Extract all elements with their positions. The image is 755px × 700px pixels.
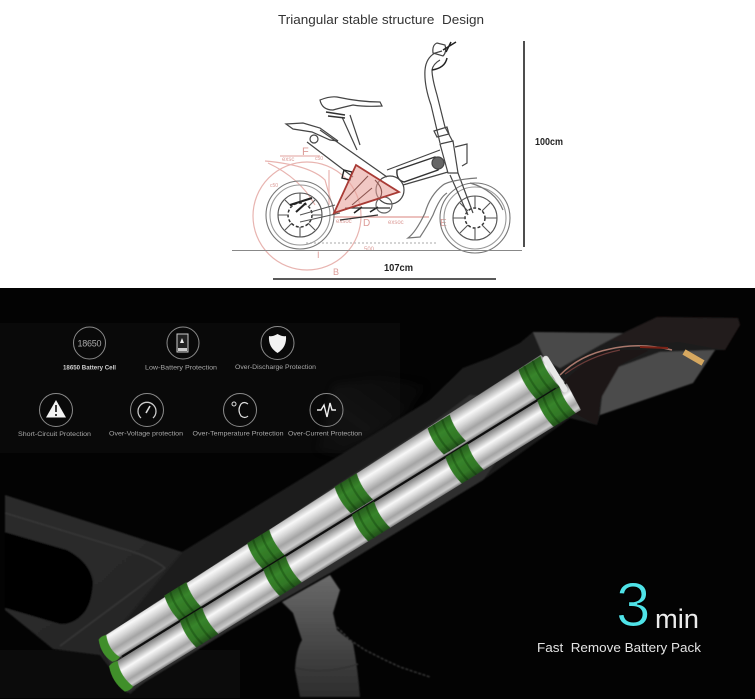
label: 18650 battery cell: 18650 Battery Cell (63, 366, 116, 372)
pink dimension overlay: 500 (364, 247, 375, 253)
label: low-battery protection: Low-Battery Protection (145, 366, 217, 372)
icon: temperature (224, 394, 256, 426)
callout: 3 min (537, 571, 702, 655)
top white panel (0, 0, 755, 288)
height label: 100cm (535, 137, 563, 148)
label: over-voltage protection: Over-Voltage protection (109, 432, 183, 438)
caption: Fast Remove Battery Pack (537, 640, 702, 655)
icon: warning triangle (40, 394, 72, 426)
pink dimension overlay: exsc (282, 157, 294, 163)
icons row two (40, 394, 343, 426)
pink dimension overlay: exsoc (336, 219, 352, 225)
seat post (282, 575, 430, 697)
cell gap (122, 389, 556, 657)
icon labels (18, 365, 362, 438)
pink dimension overlay: B (333, 267, 339, 277)
wiring and connector (560, 346, 703, 375)
battery housing (100, 317, 740, 693)
big number 3: 3 (616, 571, 650, 640)
pink dimension overlay: c50 (270, 183, 278, 189)
width dimension arrow (273, 278, 496, 280)
lower cell row (106, 383, 583, 694)
pink dimension overlay: E (440, 218, 447, 229)
icon: current wave (310, 394, 343, 426)
upper wedge background (318, 378, 425, 455)
handlebar and stem (425, 42, 456, 143)
icon: gauge (130, 394, 164, 426)
background bike frame (5, 495, 240, 694)
ground line (232, 250, 522, 252)
triangle highlight (334, 165, 399, 213)
seat, post and rack (286, 97, 387, 180)
pink dimension overlay (253, 146, 447, 277)
cell end disc (542, 355, 569, 394)
label: over-current protection: Over-Current Protection (288, 432, 362, 438)
label: short-circuit protection: Short-Circuit Protection (18, 432, 91, 438)
height dimension arrow (523, 41, 525, 247)
icon: low battery (167, 327, 199, 359)
pink dimension overlay: D (363, 218, 370, 229)
label: over-discharge protection: Over-Discharge Protection (235, 365, 316, 371)
head tube and fork (408, 141, 503, 238)
upper cell row (91, 352, 566, 665)
icons row one (74, 326, 294, 360)
pink dimension overlay: I (317, 250, 320, 260)
icon: 18650 cell: 18650 (78, 338, 102, 348)
pink dimension overlay: c50 (315, 156, 323, 162)
width label: 107cm (384, 263, 413, 274)
icon: shield (261, 326, 294, 360)
bike technical drawing (232, 42, 522, 277)
min unit: min (655, 604, 699, 634)
pink dimension overlay: exsoc (388, 220, 404, 226)
icon: 18650 cell (74, 327, 106, 359)
battery pack cells (87, 351, 583, 694)
dark battery panel (0, 288, 755, 699)
pink dimension overlay: F (302, 146, 309, 158)
title: Triangular stable structure Design (278, 13, 484, 27)
front wheel (440, 183, 510, 253)
main frame (340, 150, 448, 220)
label: over-temperature protection: Over-Temperature Protection (192, 432, 284, 438)
rear wheel (266, 181, 340, 249)
